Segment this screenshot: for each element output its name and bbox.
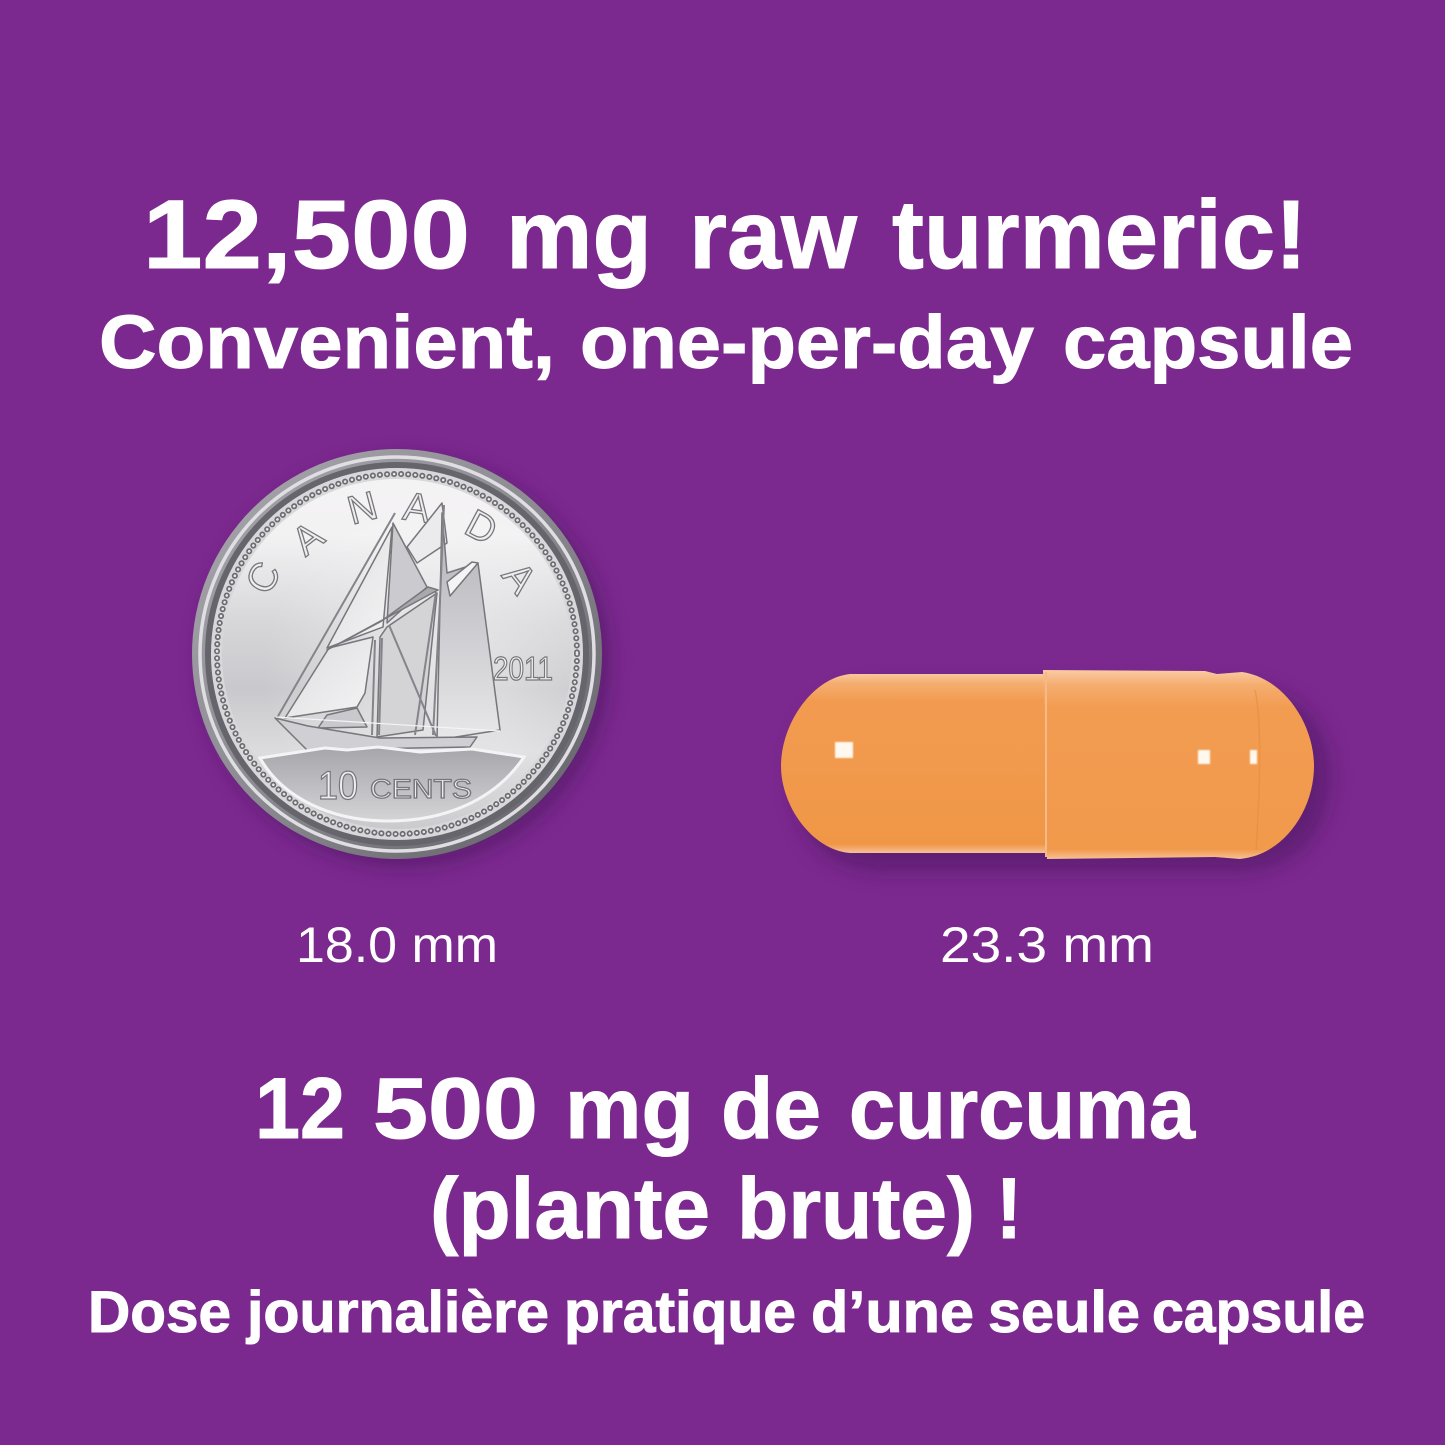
capsule cap xyxy=(1043,670,1314,859)
coin text: CANADA: C xyxy=(237,555,290,601)
coin text: CANADA: A xyxy=(284,513,332,564)
capsule shadow xyxy=(795,686,1331,872)
coin text: CANADA xyxy=(237,483,545,602)
coin text: CANADA: A xyxy=(494,554,545,602)
coin text: year: 2011 xyxy=(493,650,553,687)
coin shadow xyxy=(200,457,610,867)
title: english headline xyxy=(143,180,1307,289)
icon: canadian ten cent coin xyxy=(192,449,610,867)
french subtitle: journalière xyxy=(246,1280,549,1345)
french headline line 1: de xyxy=(721,1061,821,1157)
french headline line 2: brute) xyxy=(737,1161,975,1257)
french headline line 1 xyxy=(255,1061,1196,1157)
coin text: 10 cents: 10 xyxy=(318,764,358,808)
french headline line 1: 500 xyxy=(373,1061,538,1157)
french subtitle: capsule xyxy=(1152,1280,1365,1345)
subtitle: english: capsule xyxy=(1063,300,1353,384)
french subtitle: d’une xyxy=(811,1280,974,1345)
subtitle: english xyxy=(99,300,1353,384)
french subtitle: seule xyxy=(988,1280,1140,1345)
coin text: CANADA: N xyxy=(343,483,382,533)
french headline line 1: curcuma xyxy=(849,1061,1196,1157)
coin text: CANADA: D xyxy=(458,501,504,554)
subtitle: english: Convenient, xyxy=(99,300,555,384)
schooner xyxy=(275,503,500,750)
coin size label: 18.0 mm xyxy=(296,917,498,973)
title: english headline: mg xyxy=(506,180,652,289)
coin text: CANADA: A xyxy=(401,484,433,532)
title: english headline: turmeric! xyxy=(892,180,1307,289)
capsule highlights xyxy=(835,742,1257,764)
icon: orange capsule xyxy=(781,670,1331,872)
french headline line 1: mg xyxy=(565,1061,694,1157)
coin rim xyxy=(192,449,602,859)
french subtitle: Dose xyxy=(88,1280,231,1345)
title: english headline: 12,500 xyxy=(143,180,470,289)
coin beads xyxy=(217,474,577,834)
coin face xyxy=(222,479,572,829)
subtitle: english: one-per-day xyxy=(580,300,1034,384)
sea xyxy=(260,747,524,821)
capsule size label: 23.3 mm xyxy=(940,917,1154,973)
french headline line 2: (plante xyxy=(430,1161,710,1257)
title: english headline: raw xyxy=(689,180,858,289)
french headline line 1: 12 xyxy=(255,1061,345,1157)
french subtitle xyxy=(88,1280,1365,1345)
capsule body xyxy=(781,674,1046,853)
french subtitle: pratique xyxy=(564,1280,796,1345)
french headline line 2: ! xyxy=(996,1161,1022,1257)
french headline line 2 xyxy=(430,1161,1022,1257)
coin text: 10 cents: CENTS xyxy=(370,774,472,804)
coin text: 10 cents xyxy=(318,764,472,808)
